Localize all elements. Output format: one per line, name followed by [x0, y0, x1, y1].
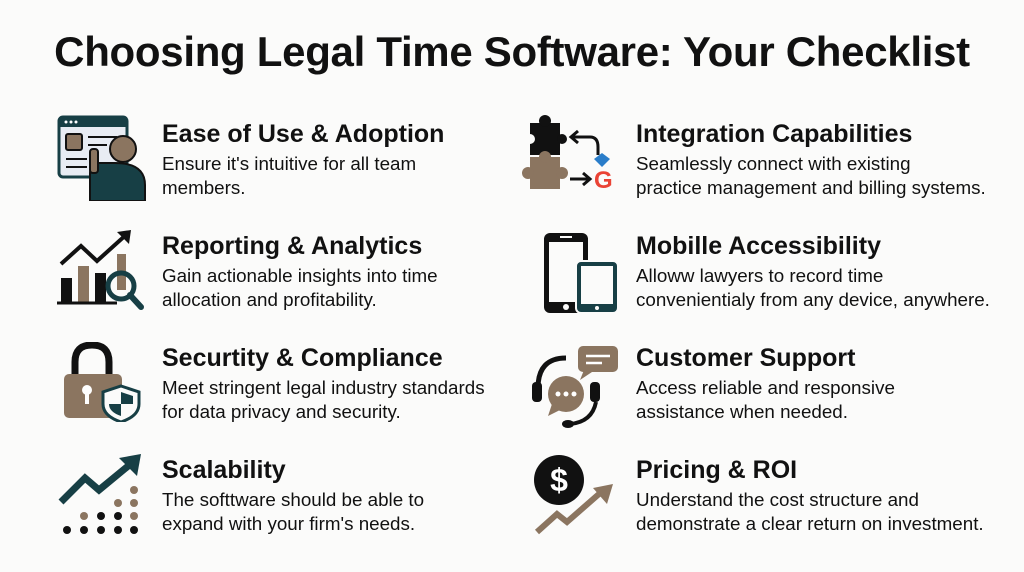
title: Choosing Legal Time Software: Your Checklist: [54, 28, 970, 75]
heading: Ease of Use & Adoption: [162, 120, 444, 148]
icon: dollar coin with trend: $: [550, 462, 568, 498]
text: [636, 489, 984, 534]
text: Ensure it's intuitive for all team: [162, 153, 416, 174]
icon: dollar coin with trend: [534, 455, 613, 534]
item: reporting: [57, 230, 438, 310]
text: practice management and billing systems.: [636, 177, 986, 198]
text: Access reliable and responsive: [636, 377, 895, 398]
heading: Securtity & Compliance: [162, 344, 443, 372]
icon: lock with shield: [64, 342, 140, 422]
text: [636, 265, 990, 310]
icon: chart with magnifier: [57, 230, 144, 310]
item: pricing: [534, 455, 984, 534]
text: Meet stringent legal industry standards: [162, 377, 485, 398]
text: Seamlessly connect with existing: [636, 153, 911, 174]
item: integration: [522, 115, 986, 198]
item: scalability: [58, 454, 424, 534]
text: [162, 377, 485, 422]
text: [636, 153, 986, 198]
icon: puzzle and arrows: G: [594, 167, 613, 194]
icon: growth arrow with dots: [58, 454, 141, 534]
text: [636, 377, 895, 422]
text: members.: [162, 177, 246, 198]
icon: phone and tablet: [544, 233, 617, 313]
text: for data privacy and security.: [162, 401, 401, 422]
text: Understand the cost structure and: [636, 489, 919, 510]
heading: Pricing & ROI: [636, 456, 797, 484]
icon: headset with chat: [532, 346, 618, 428]
text: allocation and profitability.: [162, 289, 377, 310]
text: The softtware should be able to: [162, 489, 424, 510]
text: convenientialy from any device, anywhere.: [636, 289, 990, 310]
heading: Integration Capabilities: [636, 120, 912, 148]
item: security: [64, 342, 485, 422]
item: ease of use: [58, 116, 444, 201]
text: [162, 489, 424, 534]
text: demonstrate a clear return on investment.: [636, 513, 984, 534]
text: assistance when needed.: [636, 401, 848, 422]
heading: Scalability: [162, 456, 286, 484]
text: Alloww lawyers to record time: [636, 265, 883, 286]
icon: puzzle and arrows: [522, 115, 613, 194]
heading: Customer Support: [636, 344, 855, 372]
heading: Mobille Accessibility: [636, 232, 881, 260]
item: mobile: [544, 232, 990, 313]
icon: screen with user: [58, 116, 146, 201]
text: expand with your firm's needs.: [162, 513, 415, 534]
text: [162, 265, 438, 310]
item: support: [532, 344, 895, 428]
text: [162, 153, 416, 198]
text: Gain actionable insights into time: [162, 265, 438, 286]
heading: Reporting & Analytics: [162, 232, 422, 260]
